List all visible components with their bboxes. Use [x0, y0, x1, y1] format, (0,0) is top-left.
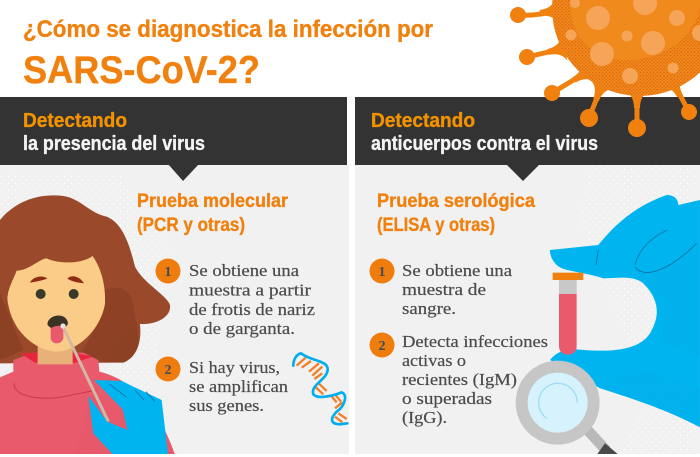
face [7, 256, 105, 352]
step 2 text: Si hay virus, [189, 358, 280, 377]
step 1 text [189, 261, 315, 338]
title [23, 16, 433, 92]
panel heading: right: anticuerpos contra el virus [371, 133, 598, 155]
panel: detecting the virus [0, 97, 349, 457]
swab [63, 326, 108, 422]
step 2 text: Detecta infecciones [402, 332, 548, 351]
test tube [559, 280, 577, 295]
panel heading: left [23, 110, 205, 155]
step 2 text [189, 358, 288, 415]
test heading: molecular [137, 191, 289, 236]
test heading: molecular: (PCR y otras) [137, 215, 245, 236]
step 2 text: se amplifican [189, 377, 288, 396]
virus spots [566, 0, 700, 84]
step 1 text: de frotis de nariz [189, 300, 315, 319]
title: SARS-CoV-2? [23, 49, 260, 92]
step 2 badge: 2 [164, 363, 172, 378]
panel heading: left: la presencia del virus [23, 133, 205, 155]
step 2 badge [370, 332, 394, 358]
step 2 text: sus genes. [189, 396, 264, 415]
mouth [47, 315, 68, 329]
panel heading: left: Detectando [23, 110, 127, 132]
eyes [36, 289, 46, 299]
test heading: serological: (ELISA y otras) [377, 215, 495, 236]
panel: detecting antibodies [355, 97, 700, 457]
step 2 badge [156, 356, 180, 382]
step 2 text [402, 332, 548, 427]
step 1 badge [156, 258, 180, 284]
tongue [51, 326, 63, 343]
panel heading: right [371, 110, 598, 155]
test heading: serological: Prueba serológica [377, 191, 535, 212]
eyebrows [30, 276, 84, 283]
neck [38, 346, 73, 364]
icon: coronavirus [510, 0, 700, 137]
illustration: woman with throat swab [0, 195, 176, 457]
glove [550, 195, 700, 427]
step 1 text [402, 261, 513, 318]
step 2 text: o superadas [402, 389, 492, 408]
glove [88, 380, 168, 457]
hair shadow [0, 288, 138, 363]
virus spikes [510, 0, 697, 137]
panel heading: right: Detectando [371, 110, 475, 132]
step 1 badge [370, 258, 394, 284]
step 1 text: Se obtiene una [402, 261, 513, 280]
test heading: serological [377, 191, 535, 236]
step 1 text: Se obtiene una [189, 261, 300, 280]
title: ¿Cómo se diagnostica la infección por [23, 16, 433, 43]
hair [0, 195, 170, 363]
illustration: gloved hand with test tube and magnifier [516, 195, 700, 457]
magnifier [584, 427, 610, 451]
test heading: molecular: Prueba molecular [137, 191, 289, 212]
step 1 text: o de garganta. [189, 319, 295, 338]
step 1 badge: 1 [164, 265, 172, 280]
step 2 text: (IgG). [402, 408, 447, 427]
icon: DNA helix [293, 353, 347, 424]
step 2 text: activas o [402, 351, 466, 370]
step 2 text: recientes (IgM) [402, 370, 517, 389]
sweater [0, 353, 176, 457]
step 1 text: muestra a partir [189, 280, 312, 300]
step 2 badge: 2 [378, 339, 386, 354]
step 1 text: sangre. [402, 299, 456, 318]
virus body [552, 0, 700, 96]
step 1 badge: 1 [378, 265, 386, 280]
glove shading [605, 250, 696, 420]
step 1 text: muestra de [402, 280, 486, 299]
